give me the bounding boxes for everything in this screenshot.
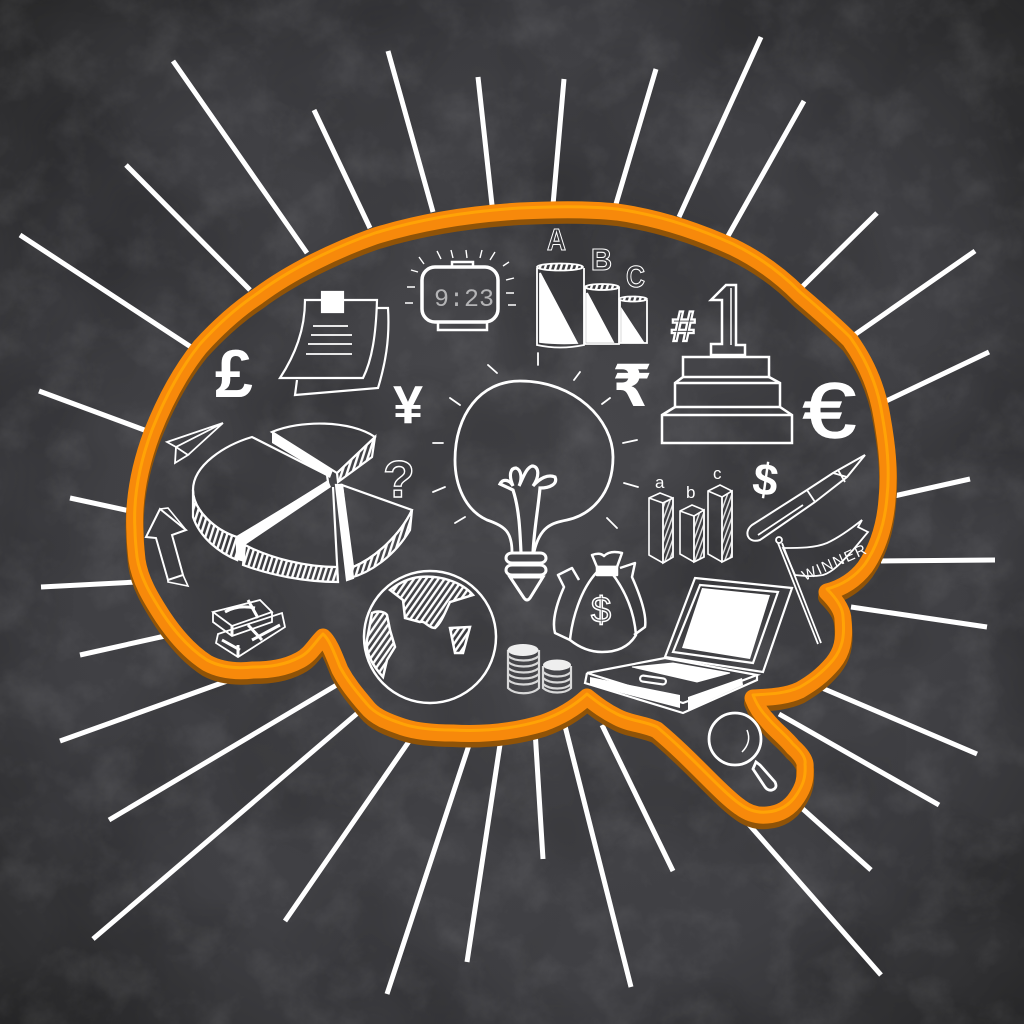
icon: yen sign: ¥ xyxy=(393,375,423,435)
icon: paper plane xyxy=(167,423,223,463)
icon: question mark: ? xyxy=(383,451,415,509)
mini bar letters xyxy=(655,464,722,502)
icon: up arrow xyxy=(146,508,188,586)
chart letters: C xyxy=(626,259,645,294)
icon: mini bars a b c xyxy=(649,485,732,563)
icon: euro sign: € xyxy=(803,367,856,454)
clock digits: 9:23 xyxy=(434,285,494,314)
chart letters: B xyxy=(591,242,612,277)
brain outline xyxy=(135,207,888,820)
icon: winner flag: WINNER xyxy=(800,541,870,585)
pie chart xyxy=(193,424,412,582)
icon: laptop xyxy=(585,578,792,713)
icon: coin stacks xyxy=(508,644,571,693)
icon: pound sign: £ xyxy=(215,336,253,412)
icon: dollar sign: $ xyxy=(750,453,782,507)
icon: light bulb xyxy=(433,353,638,600)
mini bar letters: a xyxy=(655,473,665,492)
icon: fountain pen xyxy=(747,455,865,541)
icon: globe xyxy=(364,571,496,703)
icon: cash stack xyxy=(213,600,285,657)
icon: digital clock xyxy=(405,250,516,330)
icon: bar chart with A B C xyxy=(537,264,647,348)
icon: rupee sign: ₹ xyxy=(612,354,652,419)
mini bar letters: c xyxy=(713,464,722,483)
icon: money bag xyxy=(554,552,645,652)
hash sign: # xyxy=(671,302,695,351)
icon: winner flag xyxy=(776,520,870,644)
mini bar letters: b xyxy=(686,483,695,502)
money bag dollar: $ xyxy=(591,589,611,630)
icon: number one podium xyxy=(662,285,792,443)
chart letters: A xyxy=(547,222,566,257)
icon: magnifying glass xyxy=(709,713,776,790)
chart letters xyxy=(547,222,645,294)
icon: sticky notes xyxy=(280,292,388,395)
